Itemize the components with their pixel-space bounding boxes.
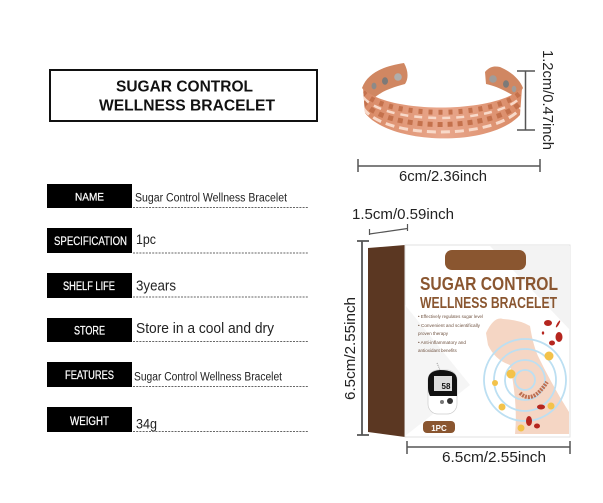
spec row: name — [47, 184, 309, 208]
box heading: SUGAR CONTROL — [420, 273, 558, 294]
product box — [368, 245, 570, 437]
spec row: weight: 34g — [136, 415, 157, 431]
box front face: WELLNESS BRACELET — [420, 295, 557, 312]
dimension: bracelet width — [358, 159, 540, 185]
box front face: 1PC — [431, 424, 447, 433]
spec row: shelf life — [47, 273, 309, 298]
dimension: bracelet height: 1.2cm/0.47inch — [539, 50, 555, 150]
glucose meter: 58 — [442, 382, 451, 391]
title box: SUGAR CONTROL — [116, 78, 253, 96]
spec row: specification: 1pc — [136, 231, 156, 247]
spec row: specification — [47, 228, 309, 253]
copper bracelet — [362, 63, 523, 138]
dimension: box width: 6.5cm/2.55inch — [442, 450, 546, 466]
spec row: weight — [47, 407, 309, 432]
glucose meter — [428, 363, 457, 414]
box benefit list: • Effectively regulates sugar level — [418, 314, 483, 319]
vitamin coins — [492, 352, 554, 432]
spec row: name: Sugar Control Wellness Bracelet — [135, 193, 288, 205]
spec row: weight: WEIGHT — [70, 416, 109, 428]
hand illustration — [486, 319, 569, 434]
dimension: box depth — [352, 207, 454, 235]
box front face — [405, 245, 570, 437]
spec row: features: Sugar Control Wellness Bracelet — [134, 372, 283, 384]
spec row: features: FEATURES — [65, 370, 114, 382]
spec row: shelf life: SHELF LIFE — [63, 281, 115, 293]
spec row: name: NAME — [75, 192, 104, 204]
box benefit list: antioxidant benefits — [418, 348, 458, 353]
glucose ring waves — [484, 339, 566, 421]
spec row: store — [47, 318, 309, 342]
dimension: box depth: 1.5cm/0.59inch — [352, 207, 454, 223]
dimension: box height: 6.5cm/2.55inch — [343, 297, 359, 400]
box benefit list: • Anti-inflammatory and — [418, 340, 466, 345]
box benefit list — [418, 314, 483, 353]
title box — [50, 70, 317, 121]
spec row: specification: SPECIFICATION — [54, 236, 127, 248]
dimension: box height — [343, 241, 369, 435]
box label plate — [445, 250, 526, 270]
dimension: bracelet height — [517, 50, 555, 150]
box side panel — [368, 245, 405, 437]
red cells — [526, 320, 562, 428]
spec row: store: Store in a cool and dry — [136, 320, 274, 337]
spec row: features — [47, 362, 309, 387]
spec row: store: STORE — [74, 326, 105, 338]
dimension: bracelet width: 6cm/2.36inch — [399, 169, 487, 185]
box benefit list: proven therapy — [418, 331, 449, 336]
spec row: shelf life: 3years — [136, 279, 176, 295]
1PC badge — [423, 421, 455, 433]
dimension: box width — [407, 441, 570, 466]
wrist bracelet — [520, 382, 547, 397]
box benefit list: • Convenient and scientifically — [418, 323, 481, 328]
title box: WELLNESS BRACELET — [99, 98, 276, 114]
